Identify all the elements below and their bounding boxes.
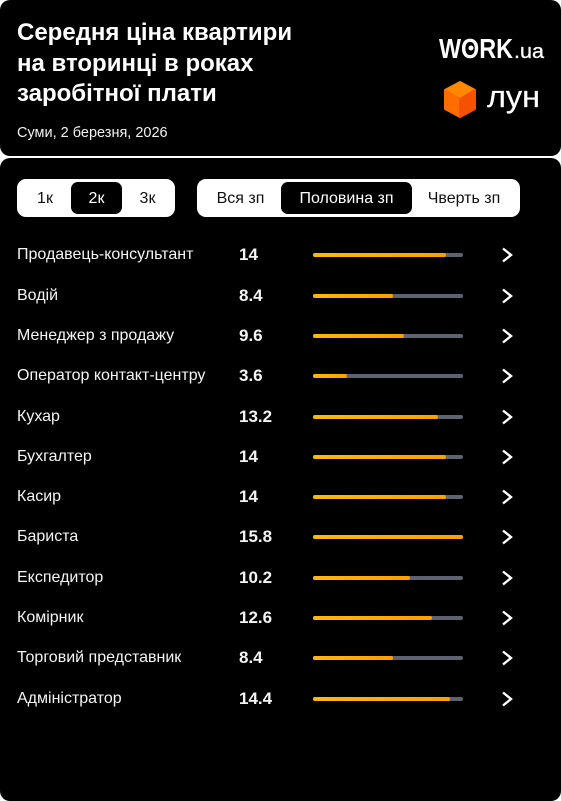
row: Бухгалтер: [17, 446, 513, 466]
row: Експедитор: Експедитор: [17, 568, 103, 586]
title: Середня ціна квартири: [17, 19, 292, 46]
title: заробітної плати: [17, 80, 217, 107]
toggle: salary share: Вся зп: [217, 190, 264, 207]
row: Водій: 8.4: [239, 286, 263, 304]
title: [17, 19, 292, 107]
row: Комірник: 12.6: [239, 608, 272, 627]
row: Менеджер з продажу: 9.6: [239, 326, 263, 345]
row: Касир: Касир: [17, 488, 61, 505]
row: Кухар: [17, 406, 513, 426]
row: Адміністратор: Адміністратор: [17, 690, 122, 706]
row: Бухгалтер: Бухгалтер: [17, 448, 92, 464]
row: Торговий представник: 8.4: [239, 648, 263, 667]
title: на вторинці в роках: [17, 50, 254, 76]
row: Касир: [17, 487, 513, 506]
panel: header: [0, 0, 561, 156]
row: Торговий представник: [17, 648, 513, 667]
toggle: salary share: Чверть зп: [428, 190, 500, 207]
row: Продавець-консультант: Продавець-консультант: [17, 246, 193, 263]
row: Комірник: [17, 608, 513, 627]
row: Оператор контакт-центру: [17, 366, 513, 385]
row: Експедитор: 10.2: [239, 568, 272, 586]
row: Кухар: Кухар: [17, 408, 60, 424]
row: Менеджер з продажу: [17, 326, 513, 345]
row: Менеджер з продажу: Менеджер з продажу: [17, 327, 174, 344]
row: Продавець-консультант: [17, 245, 513, 264]
toggle: years step: 1к: [37, 190, 53, 207]
row: Експедитор: [17, 568, 513, 586]
row: Оператор контакт-центру: Оператор контакт-центру: [17, 367, 205, 384]
row: Касир: 14: [239, 487, 258, 506]
row: Кухар: 13.2: [239, 406, 272, 426]
row: Бухгалтер: 14: [239, 446, 258, 466]
toggle: salary share: Половина зп: [299, 190, 394, 207]
subtitle: city and date: Суми, 2 березня, 2026: [17, 125, 168, 141]
logo: work.ua: .ua: [514, 41, 545, 63]
row: Бариста: [17, 527, 513, 546]
toggle: years step: 3к: [140, 190, 155, 207]
toggle: salary share: [197, 179, 520, 217]
row: Водій: Водій: [17, 286, 58, 304]
logo: lun: лун: [487, 79, 540, 114]
toggle: years step: 2к: [89, 190, 104, 207]
row: Оператор контакт-центру: 3.6: [239, 366, 263, 385]
row: Бариста: 15.8: [239, 527, 272, 546]
row: Продавець-консультант: 14: [239, 245, 258, 264]
row: Адміністратор: 14.4: [239, 688, 272, 708]
logo: lun: [444, 79, 540, 118]
row: Адміністратор: [17, 688, 513, 708]
row: Бариста: Бариста: [17, 528, 78, 545]
row: Водій: [17, 286, 513, 304]
row: Комірник: Комірник: [17, 609, 83, 626]
toggle: years step: [17, 179, 175, 217]
row: Торговий представник: Торговий представник: [17, 649, 181, 666]
